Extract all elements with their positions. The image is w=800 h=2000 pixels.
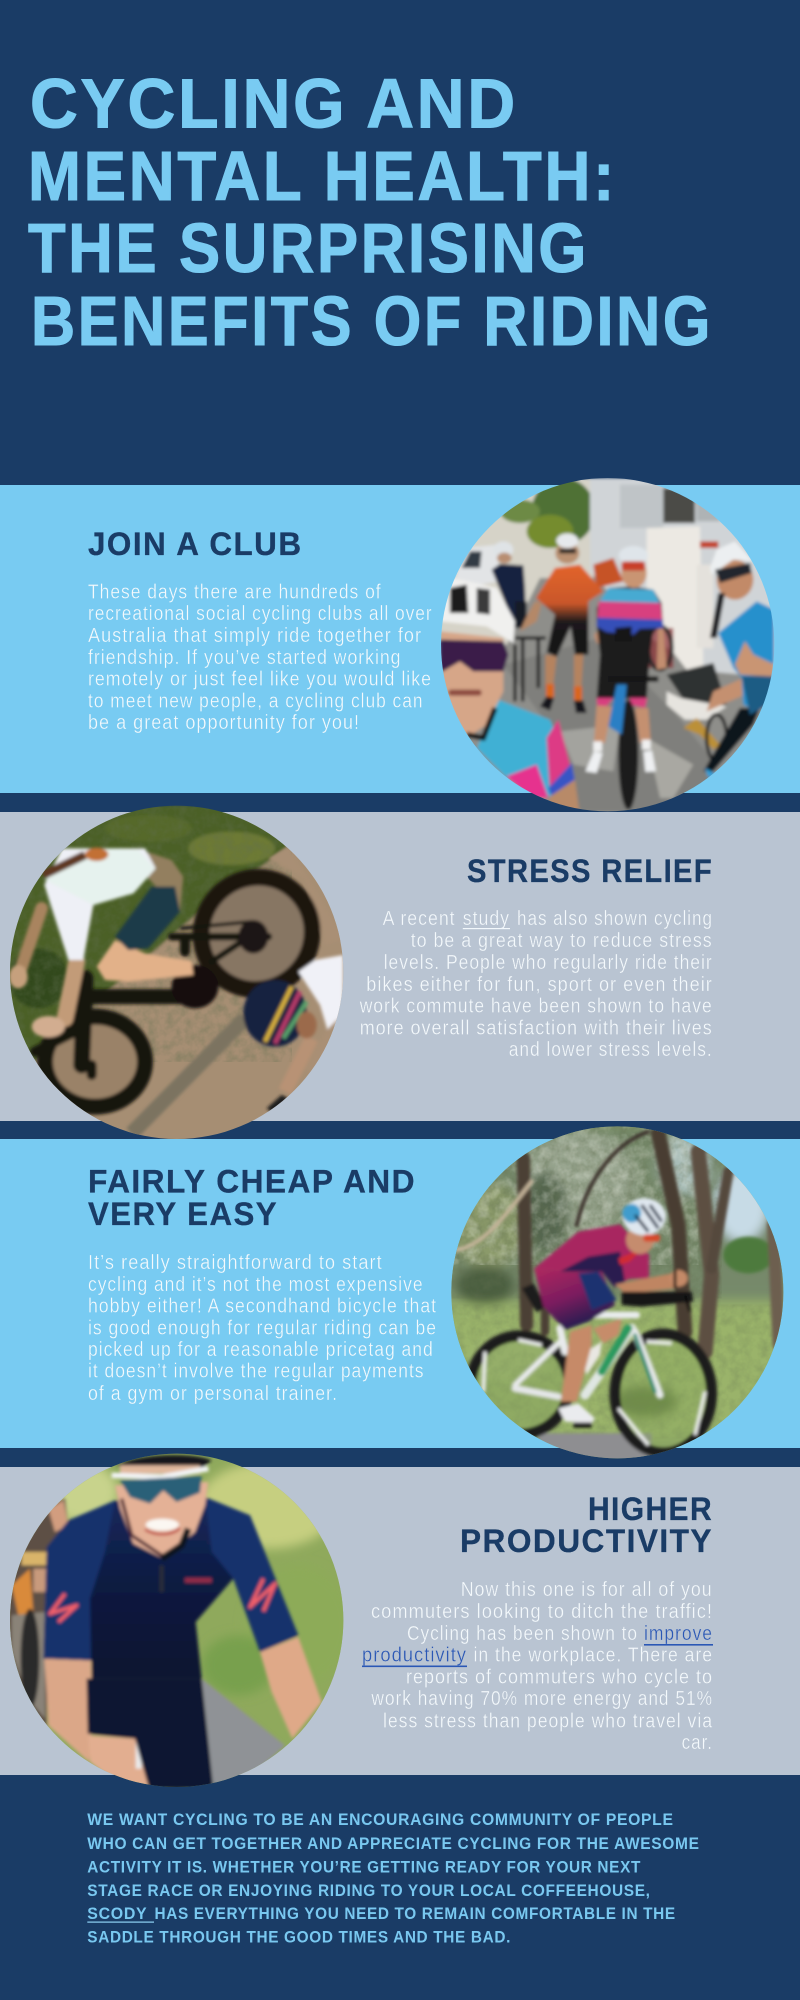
- footer text: HAS EVERYTHING YOU NEED TO REMAIN COMFORTABLE IN THE: [154, 1905, 676, 1923]
- text: fairly cheap and very easy: cycling and it’s not the most expensive: [88, 1274, 424, 1296]
- text: higher productivity: in the workplace. There are: [474, 1645, 713, 1667]
- text: higher productivity: Cycling has been shown to: [407, 1623, 638, 1645]
- text: higher productivity: car.: [682, 1732, 713, 1754]
- text: stress relief: more overall satisfaction with their lives: [360, 1017, 713, 1039]
- text: fairly cheap and very easy: of a gym or personal trainer.: [88, 1383, 338, 1405]
- text: stress relief: bikes either for fun, sport or even their: [366, 974, 713, 996]
- heading: fairly cheap and very easy: [88, 1164, 416, 1232]
- text: join a club: remotely or just feel like you would like: [88, 669, 432, 691]
- footer text: SADDLE THROUGH THE GOOD TIMES AND THE BAD.: [87, 1929, 511, 1947]
- footer text: [87, 1811, 700, 1947]
- footer text: STAGE RACE OR ENJOYING RIDING TO YOUR LOCAL COFFEEHOUSE,: [87, 1882, 651, 1900]
- panel: fairly cheap and very easy: [0, 1139, 800, 1448]
- text: higher productivity: productivity: [362, 1645, 467, 1667]
- panel: stress relief: [0, 812, 800, 1121]
- text: higher productivity: less stress than people who travel via: [383, 1710, 713, 1732]
- text: join a club: be a great opportunity for you!: [88, 712, 360, 734]
- text: join a club: recreational social cycling clubs all over: [88, 603, 433, 625]
- title: BENEFITS OF RIDING: [31, 282, 713, 360]
- text: higher productivity: work having 70% more energy and 51%: [371, 1688, 713, 1710]
- text: stress relief: to be a great way to reduce stress: [411, 930, 713, 952]
- text: higher productivity: Now this one is for all of you: [461, 1579, 713, 1601]
- text: higher productivity: [362, 1579, 713, 1754]
- panel: join a club: [0, 485, 800, 793]
- title: THE SURPRISING: [28, 209, 589, 287]
- text: stress relief: work commute have been shown to have: [359, 995, 713, 1017]
- heading: fairly cheap and very easy: FAIRLY CHEAP AND: [88, 1164, 416, 1200]
- footer text: ACTIVITY IT IS. WHETHER YOU’RE GETTING READY FOR YOUR NEXT: [87, 1858, 641, 1876]
- photo: smiling cyclist in navy jersey: [5, 1452, 352, 1792]
- text: stress relief: has also shown cycling: [517, 908, 713, 930]
- text: fairly cheap and very easy: is good enough for regular riding can be: [88, 1317, 437, 1339]
- photo: riders seen from above: [5, 805, 345, 1145]
- text: stress relief: study: [463, 908, 510, 930]
- heading: higher productivity: HIGHER: [588, 1491, 713, 1527]
- text: join a club: friendship. If you’ve started working: [88, 647, 402, 669]
- heading: stress relief: STRESS RELIEF: [467, 853, 713, 889]
- text: join a club: These days there are hundreds of: [88, 581, 382, 603]
- text: fairly cheap and very easy: [88, 1252, 437, 1405]
- title: CYCLING AND: [30, 64, 518, 142]
- footer text: SCODY: [87, 1905, 147, 1923]
- text: stress relief: [359, 908, 713, 1061]
- heading: higher productivity: PRODUCTIVITY: [460, 1523, 713, 1559]
- footer text: WE WANT CYCLING TO BE AN ENCOURAGING COMMUNITY OF PEOPLE: [87, 1811, 674, 1829]
- text: higher productivity: commuters looking to ditch the traffic!: [371, 1601, 713, 1623]
- heading: fairly cheap and very easy: VERY EASY: [88, 1196, 278, 1232]
- title: MENTAL HEALTH:: [28, 137, 617, 215]
- text: higher productivity: reports of commuters who cycle to: [406, 1666, 713, 1688]
- panel: higher productivity: [0, 1467, 800, 1775]
- photo: time trial cyclist among trees: [445, 1125, 785, 1467]
- text: stress relief: A recent: [383, 908, 456, 930]
- text: join a club: Australia that simply ride together for: [88, 625, 422, 647]
- heading: higher productivity: [460, 1491, 713, 1559]
- text: fairly cheap and very easy: It’s really straightforward to start: [88, 1252, 383, 1274]
- text: higher productivity: improve: [644, 1623, 713, 1645]
- text: join a club: [88, 581, 433, 734]
- photo: cycling club group selfie: [440, 478, 780, 818]
- text: join a club: to meet new people, a cycling club can: [88, 690, 424, 712]
- text: fairly cheap and very easy: it doesn’t involve the regular payments: [88, 1361, 424, 1383]
- footer text: WHO CAN GET TOGETHER AND APPRECIATE CYCLING FOR THE AWESOME: [87, 1835, 700, 1853]
- text: fairly cheap and very easy: hobby either! A secondhand bicycle that: [88, 1296, 437, 1318]
- text: fairly cheap and very easy: picked up for a reasonable pricetag and: [88, 1339, 434, 1361]
- heading: join a club: JOIN A CLUB: [88, 526, 302, 562]
- text: stress relief: levels. People who regularly ride their: [384, 952, 713, 974]
- text: stress relief: and lower stress levels.: [509, 1039, 713, 1061]
- title: [28, 64, 713, 360]
